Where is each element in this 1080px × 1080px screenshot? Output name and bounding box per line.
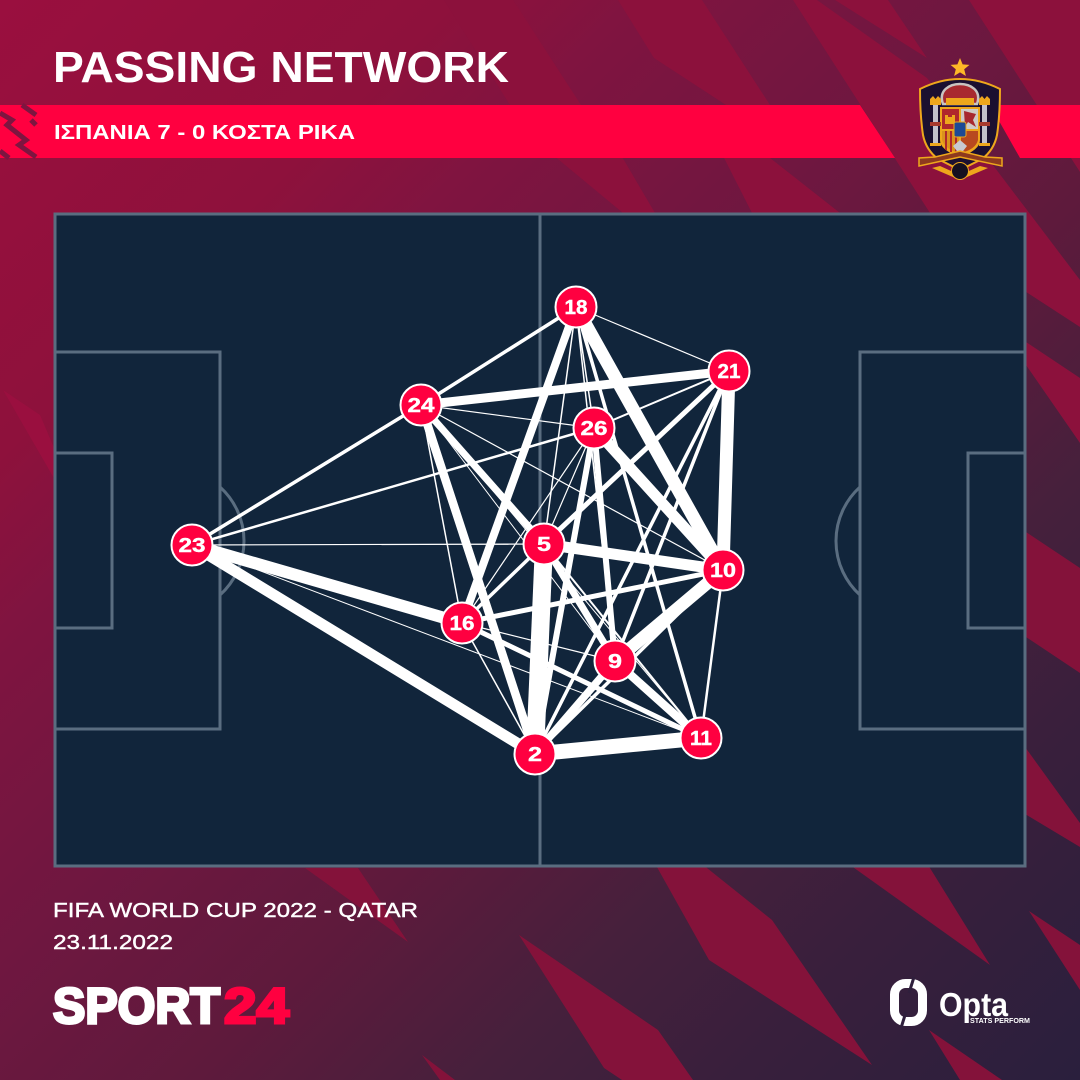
left penalty area: [55, 352, 220, 729]
crest lower chevron: [932, 166, 988, 180]
player 10: [702, 550, 744, 590]
crest football: [952, 162, 968, 180]
player 9: 9: [608, 651, 622, 673]
background angular shapes, upper: [444, 0, 1080, 443]
right six-yard box: [968, 453, 1025, 628]
player 10: 10: [710, 560, 736, 582]
player 18: [556, 286, 596, 328]
passing lines network: [192, 307, 729, 754]
player 9: [594, 640, 636, 682]
player 2: [514, 734, 556, 774]
right penalty arc: [836, 487, 860, 595]
match score subtitle: ΙΣΠΑΝΙΑ 7 - 0 ΚΟΣΤΑ ΡΙΚΑ: [54, 122, 355, 144]
crest shield outline: [920, 79, 1000, 170]
match date: 23.11.2022: [53, 932, 173, 954]
player 24: [400, 384, 442, 426]
logo: Opta wordmark: Opta: [939, 986, 1009, 1023]
crest star: [950, 58, 970, 76]
player 5: 5: [537, 534, 551, 556]
player 18: 18: [564, 297, 588, 319]
player 24: 24: [408, 395, 436, 417]
header banner: [0, 105, 1080, 158]
player 5: [524, 524, 564, 564]
player 23: [172, 524, 212, 566]
icon: Spain federation crest: [919, 58, 1002, 180]
tournament line: FIFA WORLD CUP 2022 - QATAR: [53, 900, 418, 922]
player 23: 23: [178, 535, 206, 557]
player 11: [680, 718, 722, 758]
logo: SPORT24: SPORT: [53, 978, 220, 1034]
player nodes: [172, 286, 750, 774]
title: PASSING NETWORK: [53, 44, 510, 92]
crest crown: [942, 84, 978, 104]
logo: SPORT24: 24: [224, 978, 289, 1034]
crest quarters: [942, 109, 978, 155]
player 21: 21: [718, 361, 740, 383]
right penalty area: [860, 352, 1025, 729]
player 16: [442, 602, 482, 644]
logo: Opta wordmark: STATS PERFORM: [970, 1016, 1030, 1025]
crest pillar ribbons: [930, 122, 990, 126]
crest ribbon: [919, 151, 1002, 166]
background faint left shape: [3, 390, 55, 480]
logo: Opta icon: [894, 977, 922, 1028]
player 16: 16: [450, 613, 474, 635]
crest pillars and crown band: [933, 105, 987, 145]
background angular shapes, lower: [305, 528, 1080, 1080]
player 26: [574, 408, 614, 448]
left six-yard box: [55, 453, 112, 628]
banner zigzag mark: [0, 105, 36, 158]
player 26: 26: [580, 418, 608, 440]
left penalty arc: [220, 487, 244, 595]
player 2: 2: [528, 744, 542, 766]
player 11: 11: [690, 728, 712, 750]
player 21: [708, 350, 750, 392]
pitch: [55, 214, 1025, 866]
